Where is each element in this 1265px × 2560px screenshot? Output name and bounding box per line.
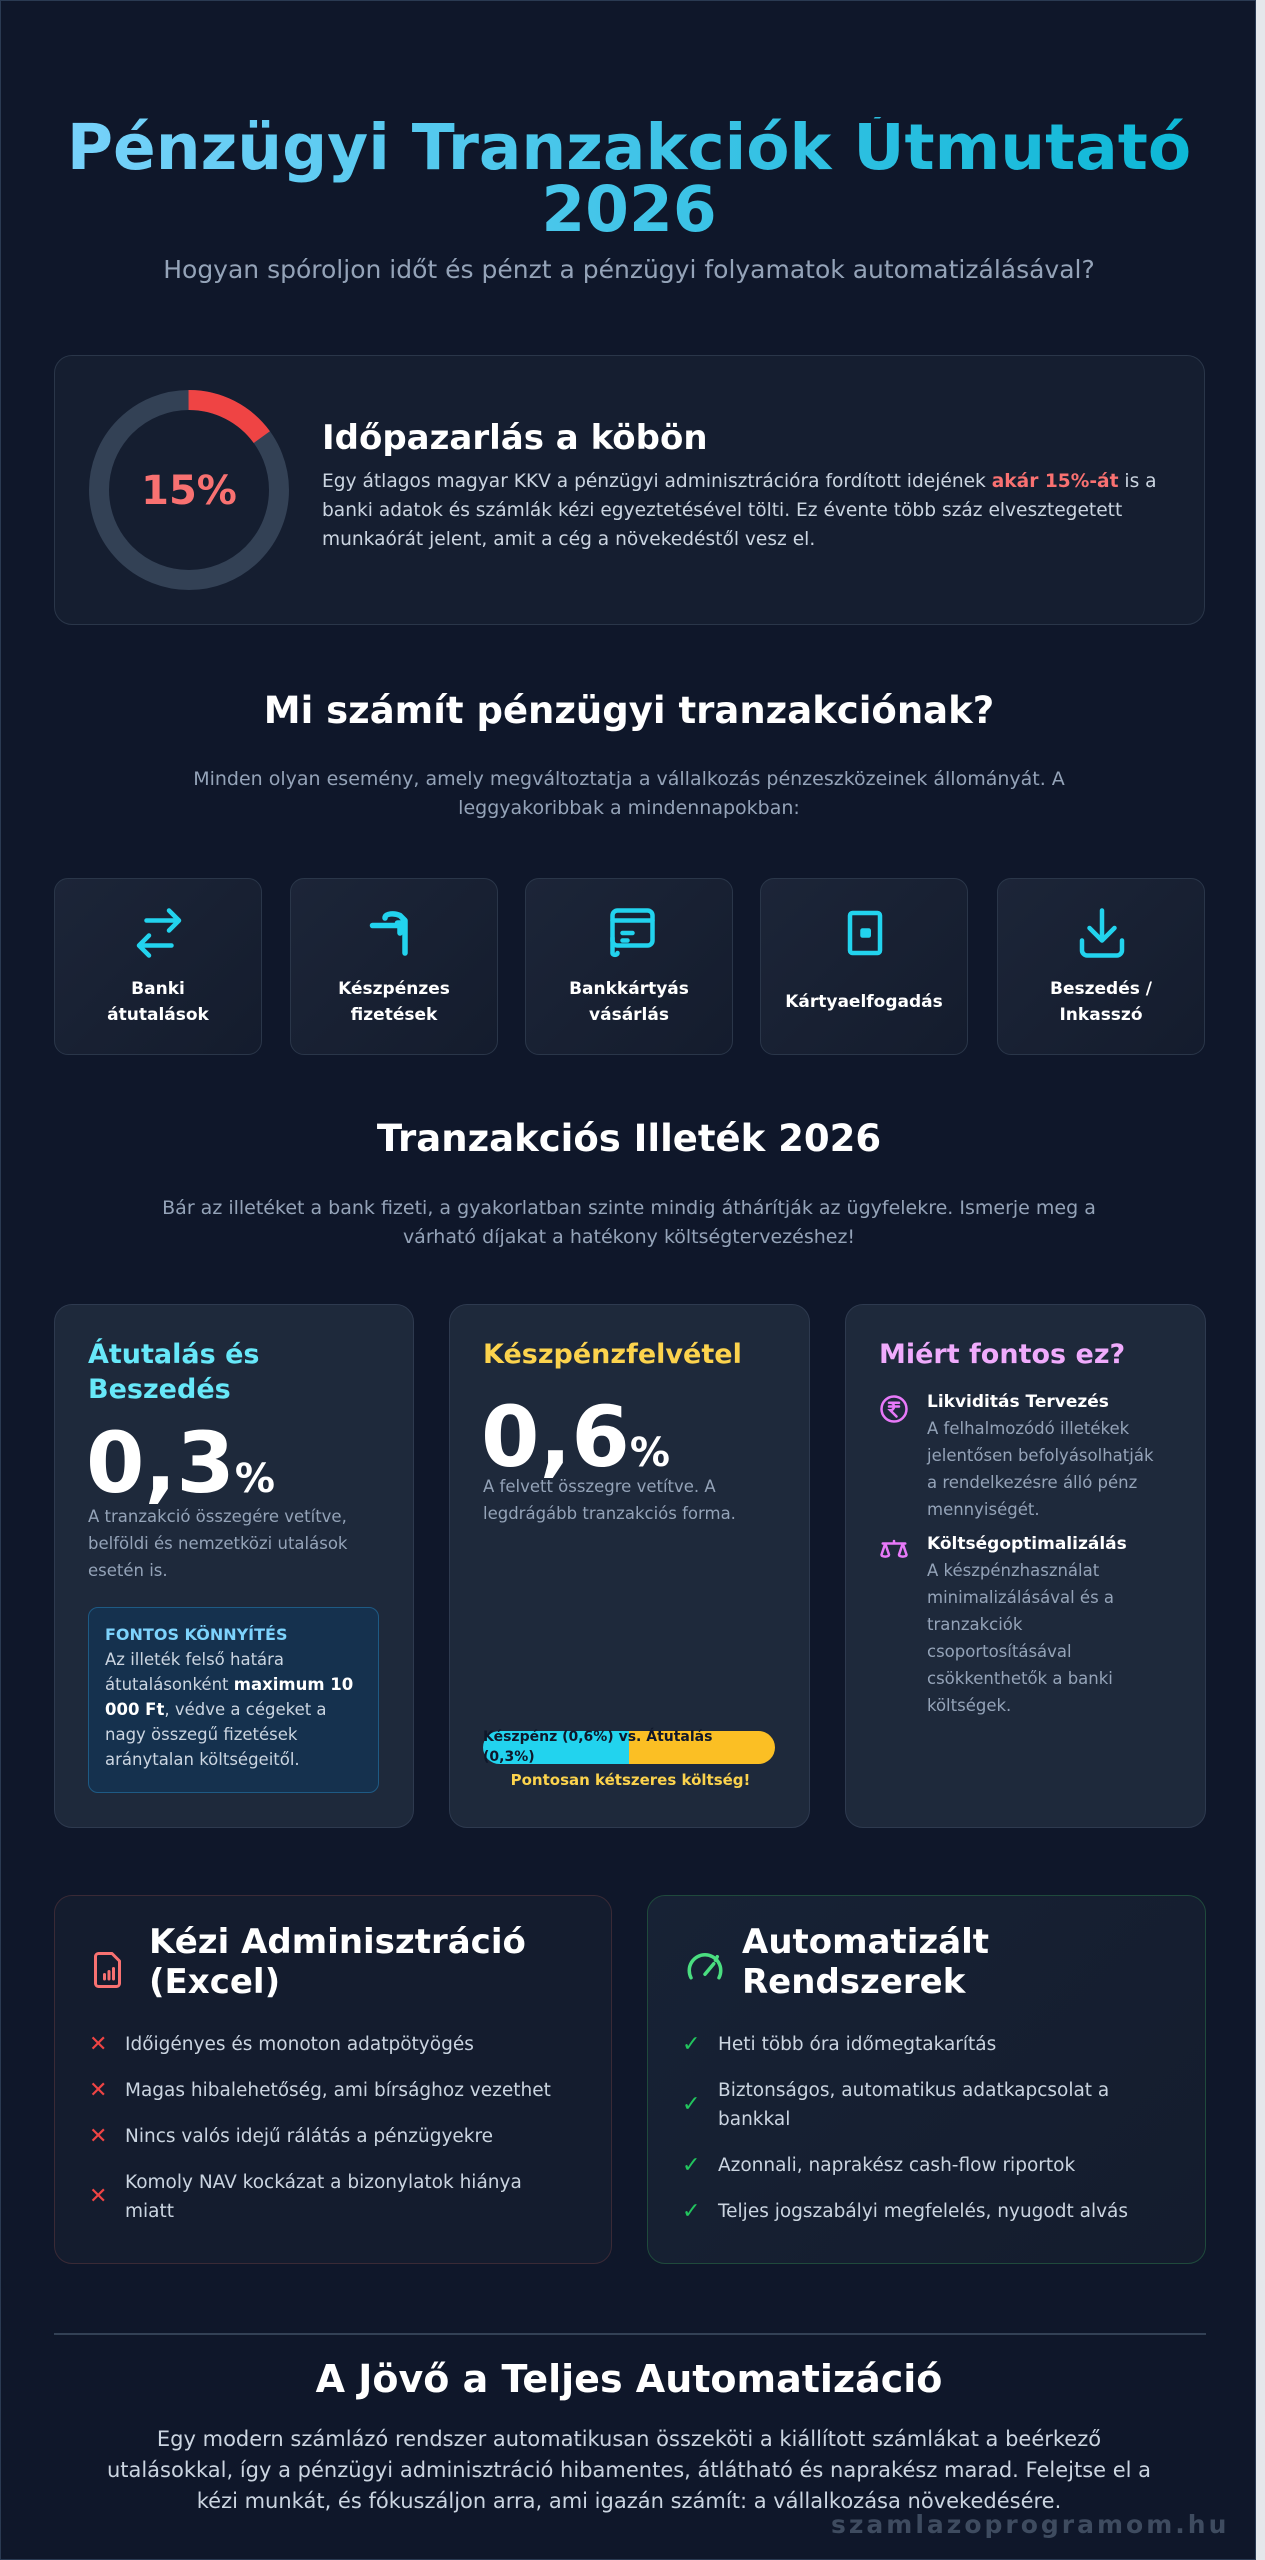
text block: Egy modern számlázó rendszer automatikusan összeköti a kiállított számlákat a beérkező utalásokkal, így a pénzügyi adminisztráció hibamentes, átlátható és naprakész marad. Felejtse el a kézi munkát, és fókuszáljon arra, ami igazán számít: a vállalkozása növekedésére. xyxy=(107,2427,1151,2513)
panel: manual admin: Komoly NAV kockázat a bizonylatok hiánya miatt xyxy=(125,2172,522,2222)
tile: cash payments: Készpénzes xyxy=(338,979,450,999)
item: cost optimisation: A készpénzhasználat minimalizálásával és a tranzakciók csoportosításával csökkenthetők a banki költségek. xyxy=(927,1561,1114,1715)
panel: manual admin xyxy=(54,1895,612,2264)
panel: transfer fee xyxy=(54,1304,414,1828)
panel: manual admin: Nincs valós idejű rálátás a pénzügyekre xyxy=(125,2126,493,2147)
list: cons: Időigényes és monoton adatpötyögés xyxy=(125,2034,474,2055)
comparison bar: Készpénz (0,6%) vs. Átutalás (0,3%) xyxy=(483,1729,712,1765)
heading: Automatizált xyxy=(742,1922,989,1962)
tile: card purchase: vásárlás xyxy=(589,1005,669,1025)
tile: bank transfers xyxy=(54,878,262,1055)
heading: Beszedés xyxy=(88,1374,231,1405)
panel: automated systems: ✓ xyxy=(682,2032,700,2057)
panel: manual admin: ✕ xyxy=(89,2078,107,2103)
panel: time waste xyxy=(54,355,1205,625)
tile: card acceptance xyxy=(760,878,968,1055)
heading: Rendszerek xyxy=(742,1962,965,2002)
description: A felvett összegre vetítve. A legdrágább tranzakciós forma. xyxy=(483,1477,736,1523)
title: 2026 xyxy=(541,173,717,246)
heading: Kézi Adminisztráció xyxy=(149,1922,526,1962)
description: A tranzakció összegére vetítve, belföldi és nemzetközi utalások esetén is. xyxy=(88,1507,348,1580)
heading xyxy=(149,1922,526,2002)
panel: manual admin: ✕ xyxy=(89,2124,107,2149)
heading: fee: Tranzakciós Illeték 2026 xyxy=(377,1117,881,1160)
panel: why important xyxy=(845,1304,1206,1828)
heading: Készpénzfelvétel xyxy=(483,1339,742,1370)
heading xyxy=(88,1338,259,1405)
icon: document chart xyxy=(94,1952,121,1988)
panel: manual admin: ✕ xyxy=(89,2184,107,2209)
watermark: szamlazoprogramom.hu xyxy=(831,2510,1229,2539)
heading: Átutalás és xyxy=(88,1339,259,1370)
heading: (Excel) xyxy=(149,1962,280,2002)
list: pros: Heti több óra időmegtakarítás xyxy=(718,2034,996,2055)
tile: card purchase xyxy=(525,878,733,1055)
big number: 0,3% xyxy=(86,1414,275,1512)
callout xyxy=(88,1607,379,1793)
tile: collection: Beszedés / xyxy=(1050,979,1152,999)
callout: FONTOS KÖNNYÍTÉS xyxy=(105,1625,288,1644)
icon: gauge xyxy=(688,1953,722,1980)
text block: Minden olyan esemény, amely megváltoztatja a vállalkozás pénzeszközeinek állományát. A leggyakoribbak a mindennapokban: xyxy=(193,768,1065,819)
panel: automated systems: ✓ xyxy=(682,2092,700,2117)
tile: card purchase: Bankkártyás xyxy=(569,979,689,999)
heading: future: A Jövő a Teljes Automatizáció xyxy=(316,2357,942,2401)
item: liquidity: Likviditás Tervezés xyxy=(927,1392,1109,1412)
title: Pénzügyi Tranzakciók Útmutató xyxy=(67,111,1191,184)
tile: bank transfers: átutalások xyxy=(107,1005,209,1025)
panel: manual admin: ✕ xyxy=(89,2032,107,2057)
tile: cash payments: fizetések xyxy=(351,1005,437,1025)
item: cost optimisation: Költségoptimalizálás xyxy=(927,1534,1127,1554)
tile: card acceptance: Kártyaelfogadás xyxy=(785,992,943,1012)
tile: cash payments xyxy=(290,878,498,1055)
heading: what counts: Mi számít pénzügyi tranzakciónak? xyxy=(264,689,994,732)
item: liquidity: A felhalmozódó illetékek jelentősen befolyásolhatják a rendelkezésre álló pénz mennyiségét. xyxy=(927,1419,1154,1519)
caption: Pontosan kétszeres költség! xyxy=(511,1771,750,1789)
tile: collection: Inkasszó xyxy=(1059,1005,1143,1025)
panel: cash withdrawal xyxy=(449,1304,810,1828)
text block: Egy átlagos magyar KKV a pénzügyi adminisztrációra fordított idejének akár 15%-át is a banki adatok és számlák kézi egyeztetésével tölti. Ez évente több száz elvesztegetett munkaórát jelent, amit a cég a növekedéstől vesz el. xyxy=(322,471,1157,550)
panel: automated systems: Azonnali, naprakész cash-flow riportok xyxy=(718,2155,1075,2176)
panel: automated systems: ✓ xyxy=(682,2199,700,2224)
donut chart 15%: 15% xyxy=(141,468,237,514)
subtitle: Hogyan spóroljon időt és pénzt a pénzügyi folyamatok automatizálásával? xyxy=(163,255,1095,284)
title xyxy=(1,117,1257,241)
panel: automated systems: Teljes jogszabályi megfelelés, nyugodt alvás xyxy=(718,2201,1128,2222)
donut chart 15% xyxy=(89,390,289,590)
panel: automated systems: Biztonságos, automatikus adatkapcsolat a bankkal xyxy=(718,2080,1109,2130)
big number: 0,6% xyxy=(481,1388,670,1486)
item: liquidity xyxy=(880,1392,1154,1519)
tile: collection xyxy=(997,878,1205,1055)
text block: Bár az illetéket a bank fizeti, a gyakorlatban szinte mindig áthárítják az ügyfelekre. Ismerje meg a várható díjakat a hatékony költségtervezéshez! xyxy=(162,1197,1096,1248)
tile: bank transfers: Banki xyxy=(131,979,185,999)
heading: Miért fontos ez? xyxy=(879,1339,1125,1370)
heading xyxy=(742,1922,989,2002)
heading: Időpazarlás a köbön xyxy=(322,418,708,458)
panel: manual admin: Magas hibalehetőség, ami bírsághoz vezethet xyxy=(125,2080,551,2101)
callout: Az illeték felső határa átutalásonként maximum 10 000 Ft, védve a cégeket a nagy összegű fizetések aránytalan költségeitől. xyxy=(105,1650,353,1769)
panel: automated systems: ✓ xyxy=(682,2153,700,2178)
panel: automated systems xyxy=(647,1895,1206,2264)
item: cost optimisation xyxy=(880,1534,1127,1715)
